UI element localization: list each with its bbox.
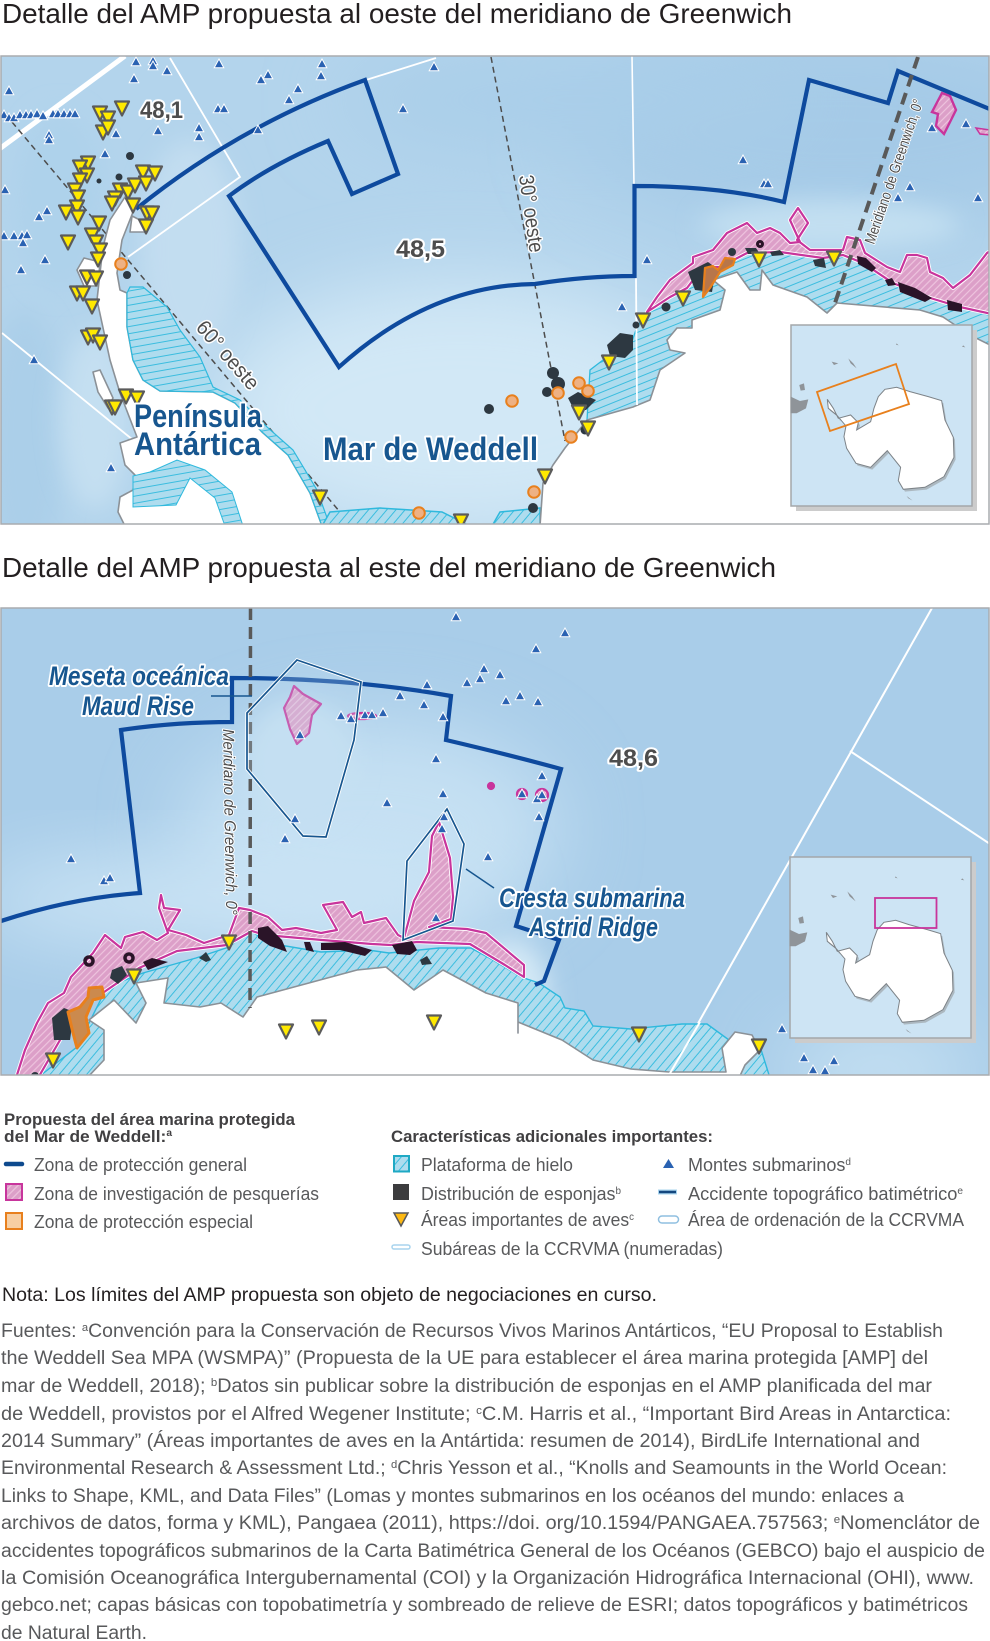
land: east coast xyxy=(540,270,990,526)
legend heading: Características adicionales importantes: xyxy=(391,1127,713,1146)
sources text block: the Weddell Sea MPA (WSMPA)” (Propuesta de la UE para establecer el área marina protegida [AMP] del xyxy=(1,1348,928,1369)
sources text block: mar de Weddell, 2018); xyxy=(1,1376,198,1397)
legend: proposed MPA xyxy=(4,1110,319,1232)
legend heading: del Mar de Weddell: xyxy=(4,1127,163,1146)
fisheries research zone: pink xyxy=(647,208,990,314)
legend: bathymetric feature: e xyxy=(957,1186,963,1197)
legend: bird areas: Áreas importantes de aves xyxy=(421,1210,635,1230)
label: Astrid Ridge xyxy=(499,883,685,942)
sponge distribution xyxy=(96,152,826,513)
sources text block: a xyxy=(82,1322,89,1334)
legend: ice shelf: Plataforma de hielo xyxy=(421,1155,573,1175)
legend: CCAMLR area: Área de ordenación de la CCRVMA xyxy=(688,1210,964,1230)
peninsula land xyxy=(97,197,322,526)
label: 60 oeste: 60° oeste xyxy=(191,316,264,395)
label: 48,1: 48,1 xyxy=(140,97,183,124)
sources text block: Environmental Research & Assessment Ltd.; xyxy=(1,1458,377,1479)
legend: general protection: Zona de protección general xyxy=(34,1155,247,1175)
AMP boundary: west xyxy=(136,71,990,367)
map background: bathymetry xyxy=(2,56,988,524)
inset locator: west xyxy=(791,325,977,511)
legend: bird areas: c xyxy=(629,1212,634,1223)
subarea lines xyxy=(697,608,988,1024)
inset pink frame xyxy=(875,898,936,928)
subarea line over shelf xyxy=(669,1022,700,1075)
AMP boundary: east xyxy=(0,678,561,985)
orange circles: special zones xyxy=(115,258,594,519)
dashed meridian 60 and 30 west xyxy=(12,57,565,524)
sources text block: Datos sin publicar sobre la distribución de esponjas en el AMP planificada del mar xyxy=(217,1376,933,1397)
leader lines xyxy=(211,696,494,888)
bathymetric feature: Astrid Ridge xyxy=(403,809,464,940)
label: Mar de Weddell: Mar de Weddell xyxy=(323,431,538,467)
fisheries research zone: pink xyxy=(16,822,524,1078)
label: Maud Rise: Maud Rise xyxy=(82,691,194,721)
sources text block: c xyxy=(476,1405,482,1417)
sources text block: 2014 Summary” (Áreas importantes de aves en la Antártida: resumen de 2014), BirdLife International and xyxy=(1,1431,920,1452)
label: 48,5: 48,5 xyxy=(396,236,445,263)
ice shelves: south Weddell xyxy=(322,508,540,526)
Maud Rise pink patch xyxy=(284,686,548,801)
legend: sponges: Distribución de esponjas xyxy=(421,1184,617,1204)
inset orange frame xyxy=(817,364,909,431)
legend: bathymetric feature: Accidente topográfico batimétrico xyxy=(688,1184,954,1204)
title: east map: Detalle del AMP propuesta al este del meridiano de Greenwich xyxy=(2,552,776,583)
legend: fisheries research: Zona de investigación de pesquerías xyxy=(34,1184,319,1204)
seamounts xyxy=(66,612,839,1075)
special protection zone xyxy=(703,258,735,297)
legend: seamounts: Montes submarinos xyxy=(688,1155,845,1175)
sponges over pink band xyxy=(857,256,962,312)
ice shelf: Ronne west xyxy=(133,460,243,526)
legend: additional features xyxy=(391,1127,964,1259)
sources text block: accidentes topográficos submarinos de la Carta Batimétrica General de los Océanos (GEBCO) bajo el auspicio de xyxy=(1,1541,985,1562)
label: Peninsula Antartica: Antártica xyxy=(134,426,261,462)
sources text block: archivos de datos, forma y KML), Pangaea (2011), https://doi. org/10.1594/PANGAEA.757563; xyxy=(1,1513,795,1534)
ice shelf: east Weddell coast xyxy=(586,255,988,420)
label: 30 oeste: 30° oeste xyxy=(514,173,548,254)
bathymetric feature: Maud Rise xyxy=(247,660,361,837)
inset Antarctica xyxy=(791,343,965,501)
label: Astrid Ridge: Astrid Ridge xyxy=(528,912,658,942)
Greenwich meridian xyxy=(833,57,918,309)
important bird areas xyxy=(59,102,841,528)
sources text block: de Weddell, provistos por el Alfred Wegener Institute; xyxy=(1,1404,448,1425)
legend heading: a xyxy=(166,1128,172,1139)
sources text block: Convención para la Conservación de Recursos Vivos Marinos Antárticos, “EU Proposal to Establish xyxy=(88,1321,943,1342)
sources text block: Chris Yesson et al., “Knolls and Seamounts in the World Ocean: xyxy=(397,1458,947,1479)
ice shelf: Larsen xyxy=(127,287,330,526)
sources text block: d xyxy=(391,1459,397,1471)
legend: special protection: Zona de protección especial xyxy=(34,1212,253,1232)
sources text block: C.M. Harris et al., “Important Bird Areas in Antarctica: xyxy=(482,1404,951,1425)
sponge distribution xyxy=(31,926,432,1080)
peninsula islands xyxy=(77,216,145,408)
special protection zone xyxy=(68,987,104,1048)
label: Peninsula Antartica: Península xyxy=(134,398,262,434)
legend heading xyxy=(4,1110,296,1146)
legend: sponges: b xyxy=(615,1186,621,1197)
sources text block: Nomenclátor de xyxy=(840,1513,980,1534)
legend: seamounts: d xyxy=(845,1157,851,1168)
sources text block: Fuentes: xyxy=(1,1321,75,1342)
Greenwich meridian xyxy=(248,608,252,1008)
sources text block: Links to Shape, KML, and Data Files” (Lomas y montes submarinos en los océanos del mundo: enlaces a xyxy=(1,1486,904,1507)
label: Greenwich meridian: Meridiano de Greenwich, 0° xyxy=(219,729,239,916)
map background: bathymetry xyxy=(0,608,989,1110)
note: Nota: Los límites del AMP propuesta son objeto de negociaciones en curso. xyxy=(2,1285,657,1306)
sources text block: gebco.net; capas básicas con topobatimetría y sombreado de relieve de ESRI; datos topográficos y batimétricos xyxy=(1,1595,968,1616)
important bird areas xyxy=(46,936,766,1068)
label: Maud Rise xyxy=(49,661,229,721)
seamounts xyxy=(0,56,983,472)
sources text block xyxy=(1,1321,985,1641)
inset locator: east xyxy=(790,857,976,1043)
sources text block: b xyxy=(211,1377,217,1389)
ice shelf: east coast xyxy=(16,930,770,1078)
label: 48,6: 48,6 xyxy=(609,745,658,772)
legend heading: Propuesta del área marina protegida xyxy=(4,1110,296,1129)
inset Antarctica xyxy=(790,876,964,1034)
panel: east detail map xyxy=(0,608,990,1110)
sources text block: e xyxy=(834,1514,840,1526)
label: Maud Rise: Meseta oceánica xyxy=(49,661,229,691)
panel: west detail map xyxy=(2,56,988,524)
label: Greenwich meridian: Meridiano de Greenwich, 0° xyxy=(862,97,927,246)
sources text block: la Comisión Oceanográfica Intergubernamental (COI) y la Organización Hidrográfica Internacional (OHI), www. xyxy=(1,1568,974,1589)
land: coast xyxy=(87,967,760,1078)
legend: subareas: Subáreas de la CCRVMA (numeradas) xyxy=(421,1239,723,1259)
subarea line over shelf xyxy=(636,278,637,405)
label: Peninsula Antartica xyxy=(134,402,264,456)
subarea lines xyxy=(0,56,634,440)
pink seamount patch xyxy=(932,93,956,134)
label: Astrid Ridge: Cresta submarina xyxy=(499,883,685,913)
